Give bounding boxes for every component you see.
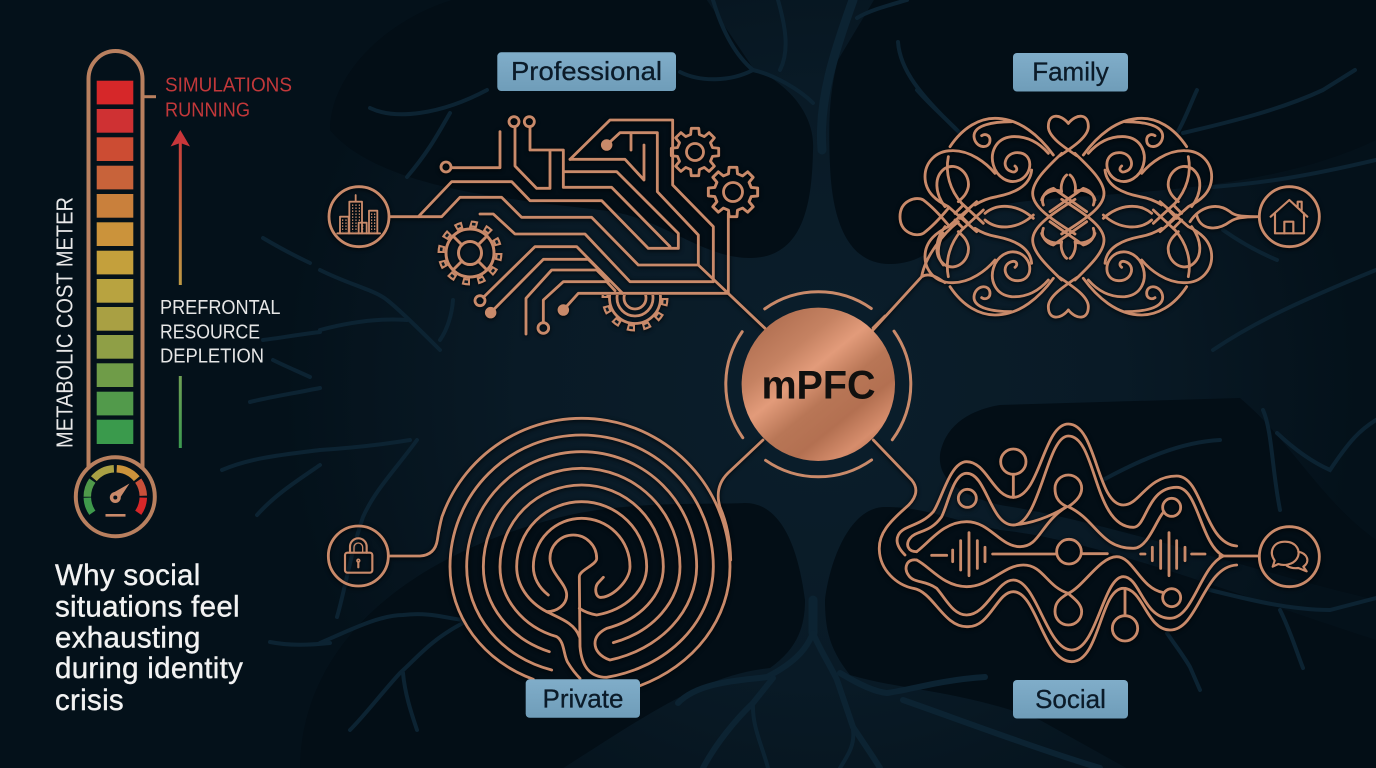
label: private: Private [543, 684, 623, 714]
sound wave right [1141, 533, 1205, 576]
icon: gear bottom [602, 295, 670, 334]
panel: family knot [870, 116, 1319, 333]
upper outer wave [897, 424, 1237, 555]
copper disc [742, 308, 895, 461]
node circles [958, 449, 1181, 641]
gauge dial [76, 457, 155, 536]
label: social: Social [1035, 684, 1106, 714]
lock icon [328, 526, 388, 586]
knot quadrant bottom left [925, 199, 1104, 317]
icon: gear right [708, 167, 758, 217]
node label: mPFC [761, 363, 876, 407]
label: professional [497, 52, 676, 91]
label: simulations running: RUNNING [165, 99, 250, 122]
title [55, 559, 243, 717]
panel: social waves [873, 424, 1319, 662]
central node: mPFC [726, 292, 911, 477]
rings around the node [726, 292, 911, 477]
chat icon [1259, 527, 1319, 587]
right leaf to house connector [1190, 206, 1258, 228]
label: family [1013, 53, 1128, 92]
metabolic cost meter [76, 51, 156, 536]
connector to mPFC [870, 222, 958, 333]
meter tube outline [88, 51, 142, 475]
left heart [900, 199, 948, 235]
panel: professional circuit [329, 117, 765, 334]
meter tick [144, 95, 156, 98]
label: prefrontal resource depletion: PREFRONTAL [160, 297, 280, 319]
knot quadrant top left [925, 116, 1104, 234]
sound wave left [932, 533, 985, 576]
label: prefrontal resource depletion: DEPLETION [160, 345, 264, 367]
label: professional: Professional [511, 56, 662, 86]
label: family: Family [1032, 56, 1109, 86]
lower second wave [906, 556, 1223, 650]
title: exhausting [55, 621, 201, 654]
icon: gear left [441, 224, 499, 282]
connector: mPFC to family [873, 316, 885, 328]
arrow: rising metabolic load [171, 130, 190, 285]
meter segments red to green [97, 81, 133, 444]
title: crisis [55, 684, 124, 717]
connector: mPFC to labyrinth [718, 440, 763, 560]
label: private [526, 679, 640, 718]
lower lens and loop [917, 557, 1163, 625]
icon: city [329, 187, 389, 247]
title: during identity [55, 652, 243, 685]
vertical label: metabolic cost meter: METABOLIC COST METER [52, 197, 78, 448]
knot quadrant top right [1033, 116, 1212, 234]
knot quadrant bottom right [1033, 199, 1212, 317]
title: Why social [55, 559, 201, 592]
arrow shaft: lower green line [179, 376, 182, 448]
upper second wave [908, 436, 1223, 556]
house icon [1259, 187, 1319, 247]
circuit traces [390, 117, 765, 334]
label: prefrontal resource depletion [160, 297, 280, 367]
label: simulations running [165, 74, 292, 122]
title: situations feel [55, 591, 240, 624]
centre slider [993, 539, 1107, 564]
label: social [1013, 680, 1128, 718]
panel: private labyrinth [328, 418, 763, 686]
upper lens and loop [917, 475, 1164, 552]
connector to chat icon [1220, 552, 1258, 560]
connector and lower outer wave [873, 440, 1237, 662]
label: prefrontal resource depletion: RESOURCE [160, 321, 260, 343]
icon: gear top [671, 128, 719, 176]
label: simulations running: SIMULATIONS [165, 74, 292, 97]
